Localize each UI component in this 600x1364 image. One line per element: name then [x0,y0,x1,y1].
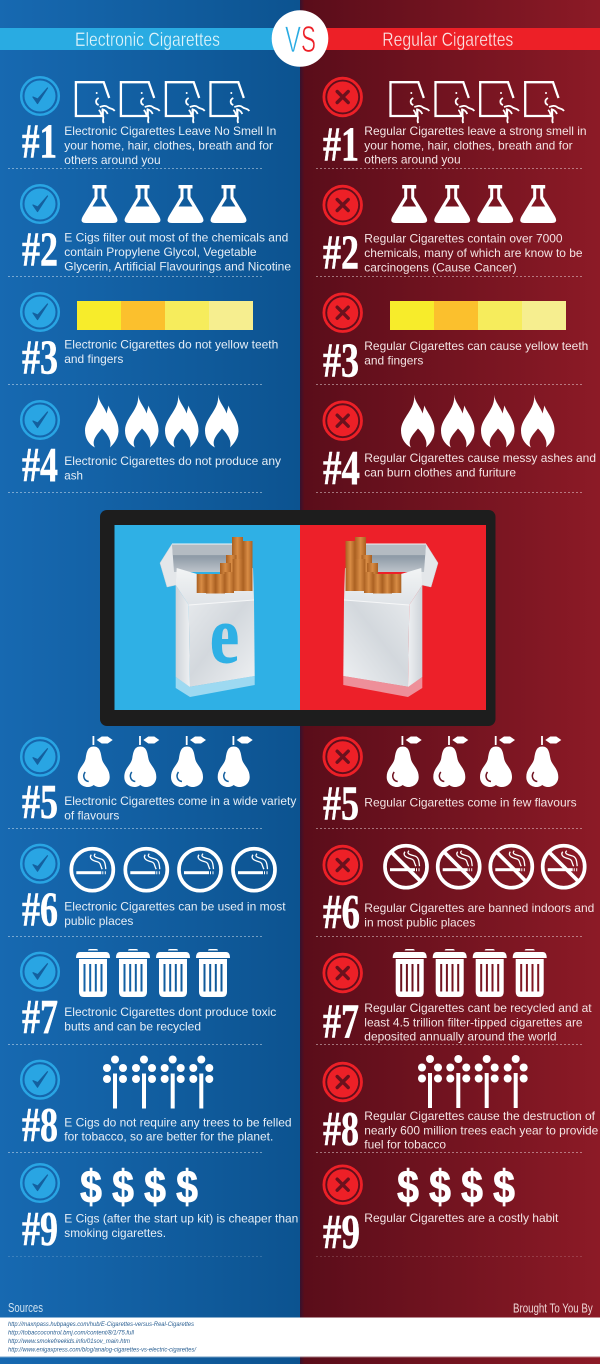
icon: dollar signs: $ [461,1160,483,1212]
item 9 regular: #9 [323,1204,360,1259]
icon: banned smoking signs [385,846,585,888]
footer white panel with sources: http://maxnpass.hubpages.com/hub/E-Cigarettes-versus-Real-Cigarettes [8,1321,195,1328]
item 2 regular: #2 [323,224,359,280]
right column, top items [323,78,596,495]
item 4 electronic: ash [64,468,83,482]
item 2 electronic [21,185,291,276]
VS badge: S [301,19,316,60]
item 5 electronic: #5 [22,774,58,829]
regular cigarette pack [343,537,438,697]
icon: flasks [391,185,556,223]
icon: doors [76,82,249,123]
item 4 regular: can burn clothes and furiture [364,465,516,479]
item 4 regular: #4 [323,440,360,495]
item 2 regular: chemicals, many of which are know to be [364,246,583,260]
item 9 regular: Regular Cigarettes are a costly habit [364,1211,559,1225]
item 4 electronic: #4 [22,437,58,492]
item 8 electronic: E Cigs do not require any trees to be felled [64,1115,292,1129]
right column, lower items [323,736,599,1259]
icon: pears [387,736,561,787]
electronic cigarette pack [160,537,255,697]
item 1 electronic: your home, hair, clothes, breath and for [64,138,273,152]
left column, lower items [21,736,298,1256]
item 8 regular: fuel for tobacco [364,1138,446,1152]
item 1 regular [323,78,587,172]
item 5 electronic [21,736,296,829]
item 1 electronic: others around you [64,153,161,167]
icon: dollar signs [80,1160,198,1212]
item 3 electronic [21,293,278,384]
item 2 regular [323,185,583,280]
footer white panel with sources: http://www.smokefreekids.info/01sov_main.htm [8,1338,130,1345]
item 4 regular: Regular Cigarettes cause messy ashes and [364,451,596,465]
header bar: regular cigarettes [300,28,600,51]
item 5 regular: Regular Cigarettes come in few flavours [364,796,577,810]
item 8 electronic [21,1056,292,1152]
right red background [300,0,600,1364]
item 4 regular [323,394,596,495]
item 1 regular: your home, hair, clothes, breath and for [364,138,573,152]
item 2 electronic: #2 [22,222,58,276]
heading: regular cigarettes: Regular Cigarettes [382,30,513,51]
item 2 electronic: Glycerin, Artificial Flavourings and Nicotine [64,260,291,274]
icon: dollar signs: $ [80,1160,102,1212]
item 8 regular: Regular Cigarettes cause the destruction of [364,1109,596,1123]
item 9 electronic: E Cigs (after the start up kit) is cheaper than [64,1212,298,1226]
item 3 regular: #3 [323,332,359,388]
left column, top items [21,77,291,492]
item 7 regular: #7 [323,994,359,1048]
icon: dollar signs: $ [429,1160,451,1212]
icon: trash cans [393,949,547,997]
item 4 electronic: Electronic Cigarettes do not produce any [64,454,281,468]
item 6 regular: Regular Cigarettes are banned indoors and [364,901,594,915]
icon: yellow swatches [77,301,253,330]
e logo: e [210,589,239,680]
item 3 regular: and fingers [364,353,423,367]
icon: flames [401,394,555,448]
icon: dollar signs: $ [176,1160,198,1212]
sources heading: Sources [8,1300,43,1315]
item 6 regular [323,846,594,939]
icon: trees [103,1056,213,1108]
item 6 electronic: Electronic Cigarettes can be used in most [64,900,286,914]
item 7 regular: Regular Cigarettes cant be recycled and at [364,1001,592,1015]
item 8 electronic: for tobacco, so are better for the planet. [64,1130,273,1144]
item 3 regular: Regular Cigarettes can cause yellow teeth [364,339,588,353]
item 7 regular: deposited annually around the world [364,1030,557,1044]
item 6 electronic [21,845,286,936]
item 2 electronic: contain Propylene Glycol, Vegetable [64,245,257,259]
header bar: electronic cigarettes [0,28,300,51]
item 4 electronic [21,394,281,492]
item 9 electronic [21,1160,298,1256]
footer white panel with sources: http://tobaccocontrol.bmj.com/content/8/1/75.full [8,1329,134,1336]
item 7 electronic: #7 [22,989,58,1044]
icon: doors [390,82,564,123]
icon: smoking signs [71,849,275,891]
icon: trees [418,1055,528,1108]
item 3 regular [323,294,588,388]
item 8 electronic: #8 [22,1097,58,1152]
icon: dollar signs: $ [144,1160,166,1212]
icon: yellow swatches [390,301,566,330]
item 7 regular [323,949,592,1048]
icon: dollar signs: $ [112,1160,134,1212]
item 6 regular: in most public places [364,915,475,929]
item 7 electronic [21,949,276,1044]
footer white panel with sources [0,1318,600,1358]
icon: dollar signs [397,1160,515,1212]
left blue background [0,0,300,1364]
item 9 regular [323,1160,559,1259]
item 5 regular: #5 [323,776,359,830]
item 5 electronic: Electronic Cigarettes come in a wide variety [64,794,296,808]
icon: trash cans [76,949,230,997]
item 9 electronic: smoking cigarettes. [64,1226,166,1240]
item 2 electronic: E Cigs filter out most of the chemicals and [64,230,288,244]
icon: flames [85,394,239,448]
item 8 regular: #8 [323,1101,359,1156]
item 8 regular: nearly 600 million trees each year to provide [364,1123,599,1137]
item 1 regular: others around you [364,152,461,166]
item 2 regular: carcinogens (Cause Cancer) [364,260,517,274]
item 1 electronic: #1 [22,114,57,168]
item 6 electronic: #6 [22,882,58,936]
screen panel with cigarette packs [100,510,496,726]
item 1 electronic: Electronic Cigarettes Leave No Smell In [64,124,276,138]
heading: electronic cigarettes: Electronic Cigarettes [75,30,220,51]
item 7 electronic: butts and can be recycled [64,1019,201,1033]
item 8 regular [323,1055,599,1156]
VS badge [272,10,328,67]
item 1 regular: #1 [323,116,359,172]
item 2 regular: Regular Cigarettes contain over 7000 [364,232,563,246]
icon: flasks [82,185,246,223]
item 3 electronic: and fingers [64,352,123,366]
icon: pears [78,736,253,787]
footer white panel with sources: http://www.enigaxpress.com/blog/analog-cigarettes-vs-electric-cigarettes/ [8,1346,197,1353]
icon: dollar signs: $ [493,1160,515,1212]
VS badge: V [285,19,301,60]
item 1 regular: Regular Cigarettes leave a strong smell in [364,124,587,138]
item 3 electronic: Electronic Cigarettes do not yellow teeth [64,338,278,352]
item 5 electronic: of flavours [64,808,119,822]
item 1 electronic [21,77,276,168]
item 5 regular [323,736,577,830]
item 3 electronic: #3 [22,330,58,384]
item 7 electronic: Electronic Cigarettes dont produce toxic [64,1005,276,1019]
item 9 electronic: #9 [22,1201,58,1256]
item 6 regular: #6 [323,884,360,939]
icon: dollar signs: $ [397,1160,419,1212]
item 6 electronic: public places [64,914,133,928]
item 7 regular: least 4.5 trillion filter-tipped cigarettes are [364,1015,583,1029]
